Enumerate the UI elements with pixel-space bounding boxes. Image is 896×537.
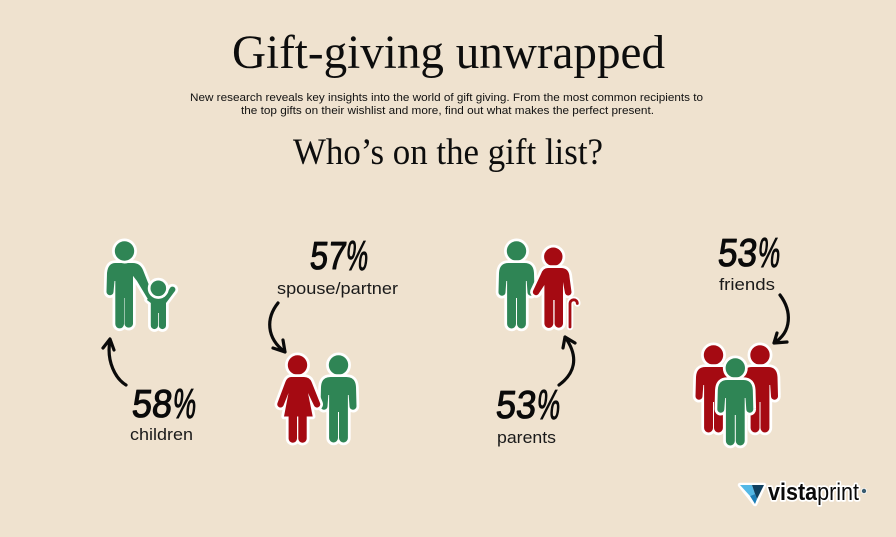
intro text: the top gifts on their wishlist and more, find out what makes the perfect present. [241,105,654,117]
label: friends: friends [719,275,775,294]
stat: friends: 53 [716,232,760,275]
arrow: spouse/partner [270,303,285,352]
stat: parents: 53 [494,384,539,427]
title: Gift-giving unwrapped [232,26,665,79]
intro text: New research reveals key insights into the world of gift giving. From the most common recipients to [190,92,703,104]
label: children: children [130,425,193,444]
arrow: friends [774,295,788,343]
icon: older couple with cane [498,241,577,328]
stat: friends [716,229,783,276]
stat: children: % [171,380,199,427]
label: parents: parents [497,428,556,447]
icon: parent and child [106,241,175,329]
stat: children [130,380,199,427]
stat: spouse/partner: 57 [308,235,349,278]
label: spouse/partner: spouse/partner [277,279,398,298]
arrow: children [103,339,126,385]
stat: spouse/partner [308,232,371,279]
icon: logo mark [740,485,764,504]
logo: vistaprint [740,479,866,506]
stat: children: 58 [130,383,175,426]
panel: friends [695,229,788,445]
icon: couple [277,355,357,443]
section heading: Who’s on the gift list? [293,132,603,173]
stat: friends: % [756,229,783,276]
icon: group of friends [695,345,778,445]
stat: parents: % [535,381,563,428]
wordmark: vistaprint [768,479,859,506]
stat: spouse/partner: % [344,232,371,279]
intro text [190,92,703,117]
panel: children [103,241,199,444]
stat: parents [494,381,563,428]
panel: parents [494,241,577,447]
panel: spouse/partner [270,232,398,443]
arrow: parents [559,337,575,385]
